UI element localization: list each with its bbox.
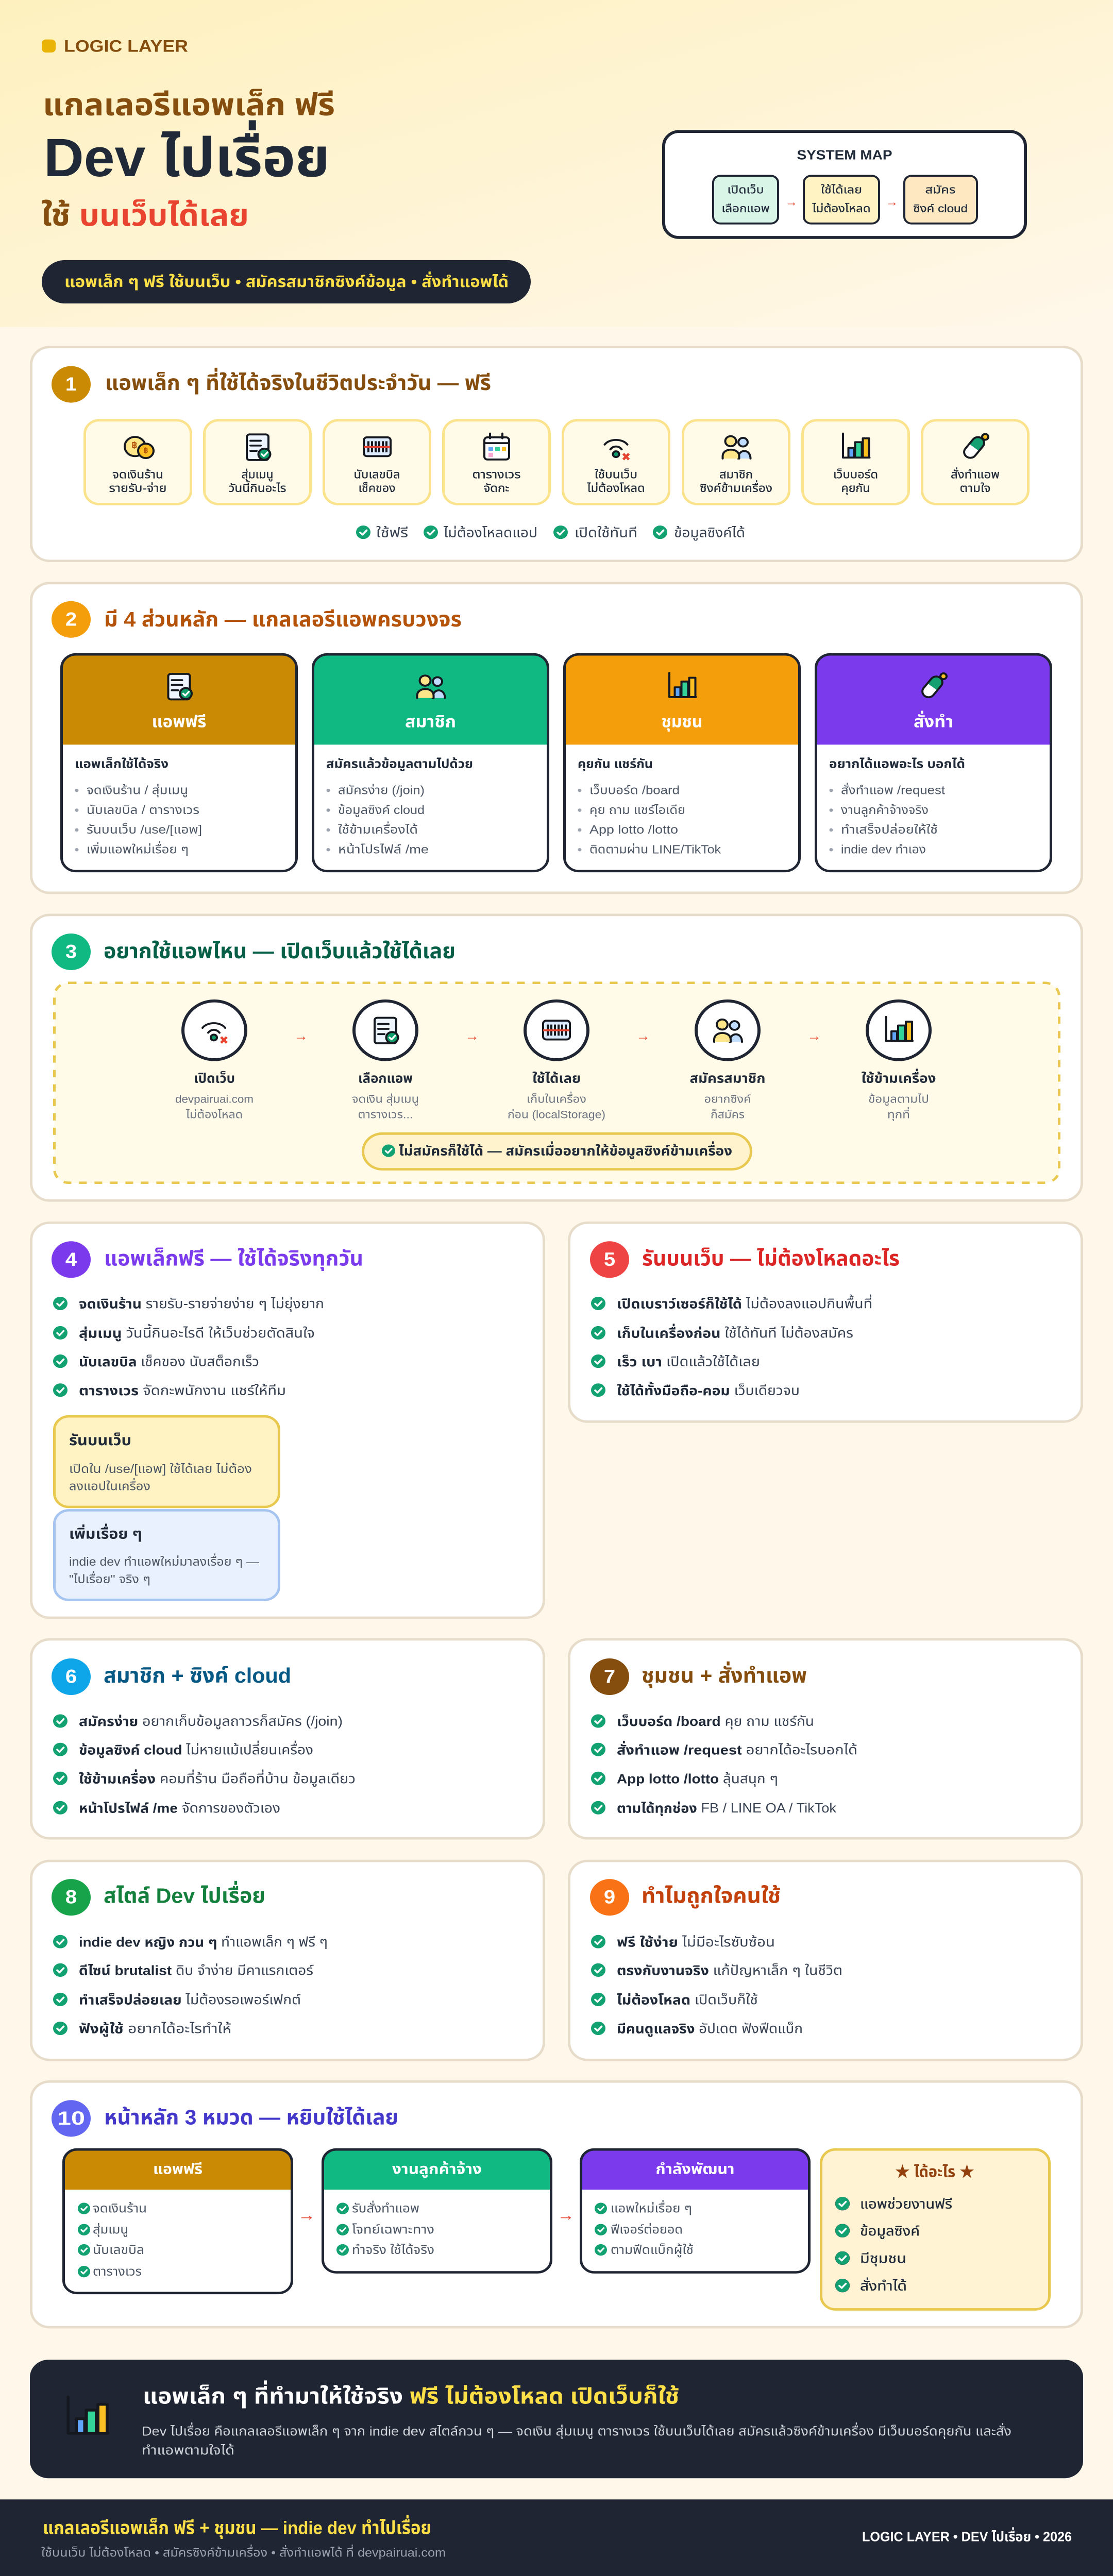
column: request: [816, 654, 1051, 871]
map node: open web: [713, 176, 778, 224]
icon: doc: [168, 674, 192, 700]
tile: shop money: รายรับ-จ่าย: [109, 482, 167, 495]
check row: เปิดใช้ทันที: [575, 524, 637, 540]
list 9: มีคนดูแลจริง อัปเดต ฟังฟีดแบ็ก: [617, 2021, 803, 2037]
step 4: ก็สมัคร: [711, 1108, 745, 1121]
map arrow: →: [785, 195, 798, 208]
heading 6: สมาชิก + ซิงค์ cloud: [104, 1664, 291, 1688]
column: free apps: จดเงินร้าน: [93, 2201, 147, 2215]
column: members: สมาชิก: [405, 713, 456, 731]
note: keep adding: [55, 1510, 279, 1600]
icon: wifi off: [605, 440, 629, 460]
list 8: ดีไซน์ brutalist ดิบ จำง่าย มีคาแรกเตอร์: [79, 1962, 314, 1978]
heading 3: อยากใช้แอพไหน — เปิดเว็บแล้วใช้ได้เลย: [104, 939, 456, 963]
system map: SYSTEM MAP: [797, 147, 892, 162]
note: run on web: เปิดใน /use/[แอพ] ใช้ได้เลย ไม่ต้อง: [69, 1462, 252, 1476]
column: free apps: [64, 2149, 292, 2293]
badge 3: 3: [65, 941, 77, 962]
list 8: [53, 1934, 328, 2037]
title line 3: ใช้ บนเว็บได้เลย: [41, 198, 249, 232]
list 7: [591, 1714, 857, 1816]
badge 6: 6: [65, 1666, 77, 1687]
map node: sign up: ซิงค์ cloud: [913, 202, 968, 215]
badge 9: [590, 1879, 629, 1916]
heading 2: มี 4 ส่วนหลัก — แกลเลอรีแอพครบวงจร: [104, 607, 462, 631]
list 4: [53, 1296, 324, 1398]
column: client work: โจทย์เฉพาะทาง: [352, 2223, 434, 2236]
list 6: [53, 1714, 356, 1816]
column: free apps: นับเลขบิล: [93, 2243, 144, 2257]
heading 8: สไตล์ Dev ไปเรื่อย: [104, 1880, 265, 1908]
list 6: สมัครง่าย อยากเก็บข้อมูลถาวรก็สมัคร (/join): [79, 1714, 343, 1729]
icon: coins: [125, 437, 154, 458]
arrow: →: [557, 2206, 575, 2224]
tile: random menu: สุ่มเมนู: [241, 468, 274, 482]
note: run on web: รันบนเว็บ: [69, 1433, 131, 1449]
badge 8: 8: [65, 1887, 77, 1908]
list 9: [591, 1934, 842, 2037]
map node: sign up: [904, 176, 977, 224]
list 4: จดเงินร้าน รายรับ-รายจ่ายง่าย ๆ ไม่ยุ่งยาก: [79, 1296, 324, 1312]
badge 8: [52, 1879, 91, 1916]
icon: calendar: [484, 433, 509, 460]
column: free apps: จดเงินร้าน / สุ่มเมนู: [87, 783, 188, 798]
step 5: ทุกที่: [887, 1107, 910, 1121]
icon: pill: [920, 673, 947, 700]
badge 6: [52, 1658, 91, 1695]
badge 1: 1: [65, 374, 77, 395]
badge 5: [590, 1241, 629, 1278]
column: members: สมัครแล้วข้อมูลตามไปด้วย: [326, 757, 473, 771]
list 9: ตรงกับงานจริง แก้ปัญหาเล็ก ๆ ในชีวิต: [617, 1962, 842, 1978]
icon: coins: ฿: [131, 440, 138, 451]
heading 7: ชุมชน + สั่งทำแอพ: [642, 1661, 807, 1688]
benefits box: ★ ได้อะไร ★: [895, 2163, 974, 2180]
badge 4: [52, 1241, 91, 1278]
column: members: ใช้ข้ามเครื่องได้: [338, 821, 418, 837]
step 2: [352, 1001, 419, 1121]
map node: open web: เลือกแอพ: [721, 202, 769, 215]
footer: [0, 2499, 1113, 2576]
section 3 panel: [31, 915, 1082, 1200]
benefits box: มีชุมชน: [860, 2250, 906, 2266]
list 7: เว็บบอร์ด /board คุย ถาม แชร์กัน: [617, 1714, 814, 1729]
tile: webboard: คุยกัน: [841, 482, 870, 495]
step 1: เปิดเว็บ: [194, 1070, 235, 1086]
list 8: indie dev หญิง กวน ๆ ทำแอพเล็ก ๆ ฟรี ๆ: [79, 1934, 328, 1950]
column: community: คุยกัน แชร์กัน: [578, 757, 653, 771]
icon: barcode: [364, 437, 391, 456]
list 8: ฟังผู้ใช้ อยากได้อะไรทำให้: [79, 2021, 231, 2037]
callout: ไม่สมัครก็ใช้ได้ — สมัครเมื่ออยากให้ข้อมูลซิงค์ข้ามเครื่อง: [399, 1141, 732, 1159]
heading 9: ทำไมถูกใจคนใช้: [642, 1884, 781, 1908]
benefits box: [821, 2149, 1049, 2310]
column: free apps: แอพฟรี: [153, 2161, 203, 2177]
step 1: devpairuai.com: [175, 1093, 254, 1106]
column: free apps: สุ่มเมนู: [93, 2223, 128, 2237]
flow container: [55, 983, 1059, 1183]
column: request: อยากได้แอพอะไร บอกได้: [829, 757, 965, 771]
list 5: ใช้ได้ทั้งมือถือ-คอม เว็บเดียวจบ: [617, 1381, 800, 1398]
list 9: ฟรี ใช้ง่าย ไม่มีอะไรซับซ้อน: [617, 1934, 775, 1950]
list 6: ข้อมูลซิงค์ cloud ไม่หายแม้เปลี่ยนเครื่อง: [79, 1740, 313, 1758]
benefits box: แอพช่วยงานฟรี: [860, 2196, 952, 2211]
tile: use on web: ไม่ต้องโหลด: [586, 482, 645, 495]
step 3: ก่อน (localStorage): [508, 1108, 605, 1121]
column: members: ข้อมูลซิงค์ cloud: [338, 804, 425, 818]
column: community: คุย ถาม แชร์ไอเดีย: [589, 804, 685, 818]
column: in progress: แอพใหม่เรื่อย ๆ: [611, 2199, 692, 2215]
banner text: ทำแอพตามใจได้: [142, 2443, 234, 2458]
note: keep adding: indie dev ทำแอพใหม่มาลงเรื่อย ๆ —: [69, 1553, 260, 1569]
column: client work: ทำจริง ใช้ได้จริง: [352, 2243, 434, 2257]
badge 10: 10: [57, 2108, 85, 2129]
badge 5: 5: [604, 1249, 615, 1270]
column: free apps: เพิ่มแอพใหม่เรื่อย ๆ: [87, 841, 189, 856]
map node: sign up: สมัคร: [925, 183, 955, 196]
callout: [363, 1133, 751, 1170]
heading 5: รันบนเว็บ — ไม่ต้องโหลดอะไร: [642, 1247, 900, 1270]
step 2: เลือกแอพ: [358, 1070, 413, 1086]
step 5: ข้อมูลตามไป: [868, 1093, 929, 1107]
list 7: สั่งทำแอพ /request อยากได้อะไรบอกได้: [617, 1740, 857, 1757]
icon: coins: ฿: [143, 447, 148, 455]
footer subtitle: ใช้บนเว็บ ไม่ต้องโหลด • สมัครซิงค์ข้ามเครื่อง • สั่งทำแอพได้ ที่ devpairuai.com: [41, 2544, 446, 2560]
list 5: เก็บในเครื่องก่อน ใช้ได้ทันที ไม่ต้องสมัคร: [617, 1323, 853, 1341]
column: free apps: แอพเล็กใช้ได้จริง: [75, 757, 168, 771]
check row: ข้อมูลซิงค์ได้: [674, 524, 745, 540]
step 3: [508, 1001, 605, 1121]
tile: webboard: เว็บบอร์ด: [833, 468, 878, 481]
tile: request app: [922, 420, 1028, 504]
section 4 panel: [31, 1223, 544, 1618]
column: in progress: ฟีเจอร์ต่อยอด: [611, 2223, 683, 2236]
column: in progress: กำลังพัฒนา: [655, 2161, 734, 2177]
tagline pill: แอพเล็ก ๆ ฟรี ใช้บนเว็บ • สมัครสมาชิกซิงค์ข้อมูล • สั่งทำแอพได้: [64, 271, 509, 291]
section 5 panel: [569, 1223, 1082, 1421]
list 4: ตารางเวร จัดกะพนักงาน แชร์ให้ทีม: [79, 1382, 286, 1398]
check row: ใช้ฟรี: [376, 524, 408, 540]
footer credit: LOGIC LAYER • DEV ไปเรื่อย • 2026: [862, 2527, 1072, 2544]
column: in progress: [581, 2149, 809, 2273]
footer title: แกลเลอรีแอพเล็ก ฟรี + ชุมชน — indie dev ทำไปเรื่อย: [43, 2515, 431, 2539]
tile: request app: ตามใจ: [959, 482, 990, 495]
list 6: ใช้ข้ามเครื่อง คอมที่ร้าน มือถือที่บ้าน ข้อมูลเดียว: [79, 1769, 356, 1787]
note: keep adding: เพิ่มเรื่อย ๆ: [69, 1523, 142, 1542]
column: members: สมัครง่าย (/join): [338, 783, 425, 797]
arrow: →: [294, 1028, 308, 1043]
tile: bill counter: นับเลขบิล: [353, 468, 400, 481]
tile: members: สมาชิก: [719, 468, 753, 481]
tile: random menu: วันนี้กินอะไร: [228, 480, 286, 495]
icon: chart: [68, 2397, 108, 2433]
badge 1: [52, 366, 91, 403]
badge 9: 9: [604, 1887, 615, 1908]
tile: request app: สั่งทำแอพ: [951, 467, 1000, 481]
column: request: สั่งทำ: [914, 710, 953, 731]
column: free apps: ตารางเวร: [93, 2265, 142, 2279]
map node: use now: ใช้ได้เลย: [821, 183, 862, 196]
note: run on web: [55, 1416, 279, 1507]
section 2 panel: [31, 583, 1082, 893]
column: client work: รับสั่งทำแอพ: [352, 2200, 419, 2215]
column: request: งานลูกค้าจ้างจริง: [841, 804, 929, 818]
list 9: ไม่ต้องโหลด เปิดเว็บก็ใช้: [617, 1992, 758, 2007]
step 3: ใช้ได้เลย: [532, 1070, 581, 1086]
section 9 panel: [569, 1861, 1082, 2060]
tile: use on web: ใช้บนเว็บ: [595, 468, 637, 481]
list 6: หน้าโปรไฟล์ /me จัดการของตัวเอง: [79, 1800, 280, 1816]
heading 1: แอพเล็ก ๆ ที่ใช้ได้จริงในชีวิตประจำวัน — ฟรี: [105, 367, 491, 395]
column: members: [313, 654, 548, 871]
badge 3: [52, 934, 91, 970]
note: run on web: ลงแอปในเครื่อง: [69, 1478, 150, 1493]
icon: people: [417, 675, 445, 698]
list 5: [591, 1294, 872, 1398]
heading 4: แอพเล็กฟรี — ใช้ได้จริงทุกวัน: [104, 1247, 363, 1271]
banner title: แอพเล็ก ๆ ที่ทำมาให้ใช้จริง ฟรี ไม่ต้องโหลด เปิดเว็บก็ใช้: [143, 2380, 679, 2409]
icon: chart: [669, 673, 696, 697]
badge 10: [52, 2100, 91, 2137]
section 7 panel: [569, 1639, 1082, 1838]
badge 2: 2: [65, 609, 77, 630]
column: free apps: รันบนเว็บ /use/[แอพ]: [87, 823, 202, 837]
column: client work: [323, 2149, 551, 2273]
tile: use on web: [563, 420, 669, 504]
map arrow: →: [886, 195, 898, 208]
step 2: ตารางเวร...: [358, 1108, 413, 1121]
icon: chart: [843, 433, 870, 457]
step 5: [861, 1001, 936, 1121]
step 2: จดเงิน สุ่มเมนู: [352, 1093, 419, 1107]
section 1 panel: [31, 347, 1082, 561]
column: community: [565, 654, 800, 871]
system map: [664, 131, 1025, 238]
step 4: [689, 1001, 765, 1121]
arrow: →: [465, 1028, 479, 1043]
title line 2: Dev ไปเรื่อย: [44, 120, 330, 188]
tile: members: ซิงค์ข้ามเครื่อง: [700, 480, 772, 495]
badge 4: 4: [65, 1249, 77, 1270]
banner text: [142, 2422, 1011, 2458]
icon: people: [722, 436, 750, 459]
list 5: เร็ว เบา เปิดแล้วใช้ได้เลย: [617, 1353, 760, 1369]
step 4: อยากซิงค์: [704, 1093, 751, 1106]
list 7: ตามได้ทุกช่อง FB / LINE OA / TikTok: [617, 1800, 836, 1816]
tile: webboard: [803, 420, 909, 504]
column: request: indie dev ทำเอง: [841, 843, 926, 856]
column: community: ชุมชน: [661, 713, 702, 732]
column: community: ติดตามผ่าน LINE/TikTok: [589, 842, 721, 856]
column: free apps: นับเลขบิล / ตารางเวร: [87, 804, 199, 817]
tile: shift table: ตารางเวร: [472, 468, 520, 481]
column: free apps: [62, 654, 297, 871]
column: free apps: แอพฟรี: [151, 713, 206, 731]
tagline pill: [42, 260, 531, 303]
arrow: →: [807, 1028, 821, 1043]
check row: ไม่ต้องโหลดแอป: [443, 524, 537, 540]
tile: shop money: [85, 420, 191, 504]
section 8 panel: [31, 1861, 544, 2060]
column: request: สั่งทำแอพ /request: [841, 783, 945, 797]
note: keep adding: "ไปเรื่อย" จริง ๆ: [69, 1571, 150, 1586]
map node: use now: [804, 176, 879, 224]
summary banner: [30, 2360, 1083, 2478]
arrow: →: [298, 2206, 315, 2224]
column: community: App lotto /lotto: [589, 823, 678, 837]
brand tag: LOGIC LAYER: [64, 37, 188, 56]
map node: use now: ไม่ต้องโหลด: [812, 202, 870, 215]
tile: bill counter: เช็คของ: [359, 482, 396, 495]
step 1: [175, 1001, 254, 1121]
step 1: ไม่ต้องโหลด: [185, 1108, 243, 1121]
header panel: [0, 0, 1113, 327]
icon: doc: [247, 434, 270, 460]
section 10 panel: [31, 2081, 1082, 2327]
badge 2: [52, 601, 91, 638]
list 5: เปิดเบราว์เซอร์ก็ใช้ได้ ไม่ต้องลงแอปกินพื้นที่: [617, 1294, 872, 1311]
step 4: สมัครสมาชิก: [689, 1070, 765, 1086]
column: request: ทำเสร็จปล่อยให้ใช้: [841, 823, 938, 837]
list 4: นับเลขบิล เช็คของ นับสต็อกเร็ว: [79, 1353, 259, 1369]
section 6 panel: [31, 1639, 544, 1838]
step 3: เก็บในเครื่อง: [527, 1092, 586, 1106]
arrow: →: [636, 1028, 650, 1043]
column: community: เว็บบอร์ด /board: [589, 783, 680, 797]
tile: shop money: จดเงินร้าน: [112, 468, 163, 481]
list 4: สุ่มเมนู วันนี้กินอะไรดี ให้เว็บช่วยตัดสินใจ: [79, 1324, 315, 1341]
banner text: Dev ไปเรื่อย คือแกลเลอรีแอพเล็ก ๆ จาก indie dev สไตล์กวน ๆ — จดเงิน สุ่มเมนู ตารางเวร ใช้บนเว็บได้เลย สมัครแล้วซิงค์ข้ามเครื่อง มีเว็บบอร์ดคุยกัน และสั่ง: [142, 2422, 1011, 2439]
tile: shift table: จัดกะ: [483, 482, 509, 495]
tile: shift table: [443, 420, 549, 504]
title line 1: แกลเลอรีแอพเล็ก ฟรี: [43, 88, 335, 122]
check row: [356, 524, 745, 540]
column: client work: งานลูกค้าจ้าง: [392, 2161, 482, 2178]
heading 10: หน้าหลัก 3 หมวด — หยิบใช้ได้เลย: [104, 2106, 398, 2129]
list 8: ทำเสร็จปล่อยเลย ไม่ต้องรอเพอร์เฟกต์: [79, 1992, 301, 2007]
badge 7: 7: [604, 1666, 615, 1687]
badge 7: [590, 1658, 629, 1695]
list 7: App lotto /lotto ลุ้นสนุก ๆ: [617, 1771, 778, 1787]
tile: bill counter: [324, 420, 430, 504]
column: members: หน้าโปรไฟล์ /me: [338, 843, 429, 856]
tile: random menu: [204, 420, 310, 504]
icon: pill: [962, 434, 988, 460]
map node: open web: เปิดเว็บ: [728, 183, 764, 196]
benefits box: สั่งทำได้: [860, 2277, 907, 2293]
tile: members: [683, 420, 789, 504]
column: in progress: ตามฟีดแบ็กผู้ใช้: [611, 2243, 694, 2258]
benefits box: ข้อมูลซิงค์: [860, 2223, 920, 2239]
step 5: ใช้ข้ามเครื่อง: [861, 1069, 936, 1086]
